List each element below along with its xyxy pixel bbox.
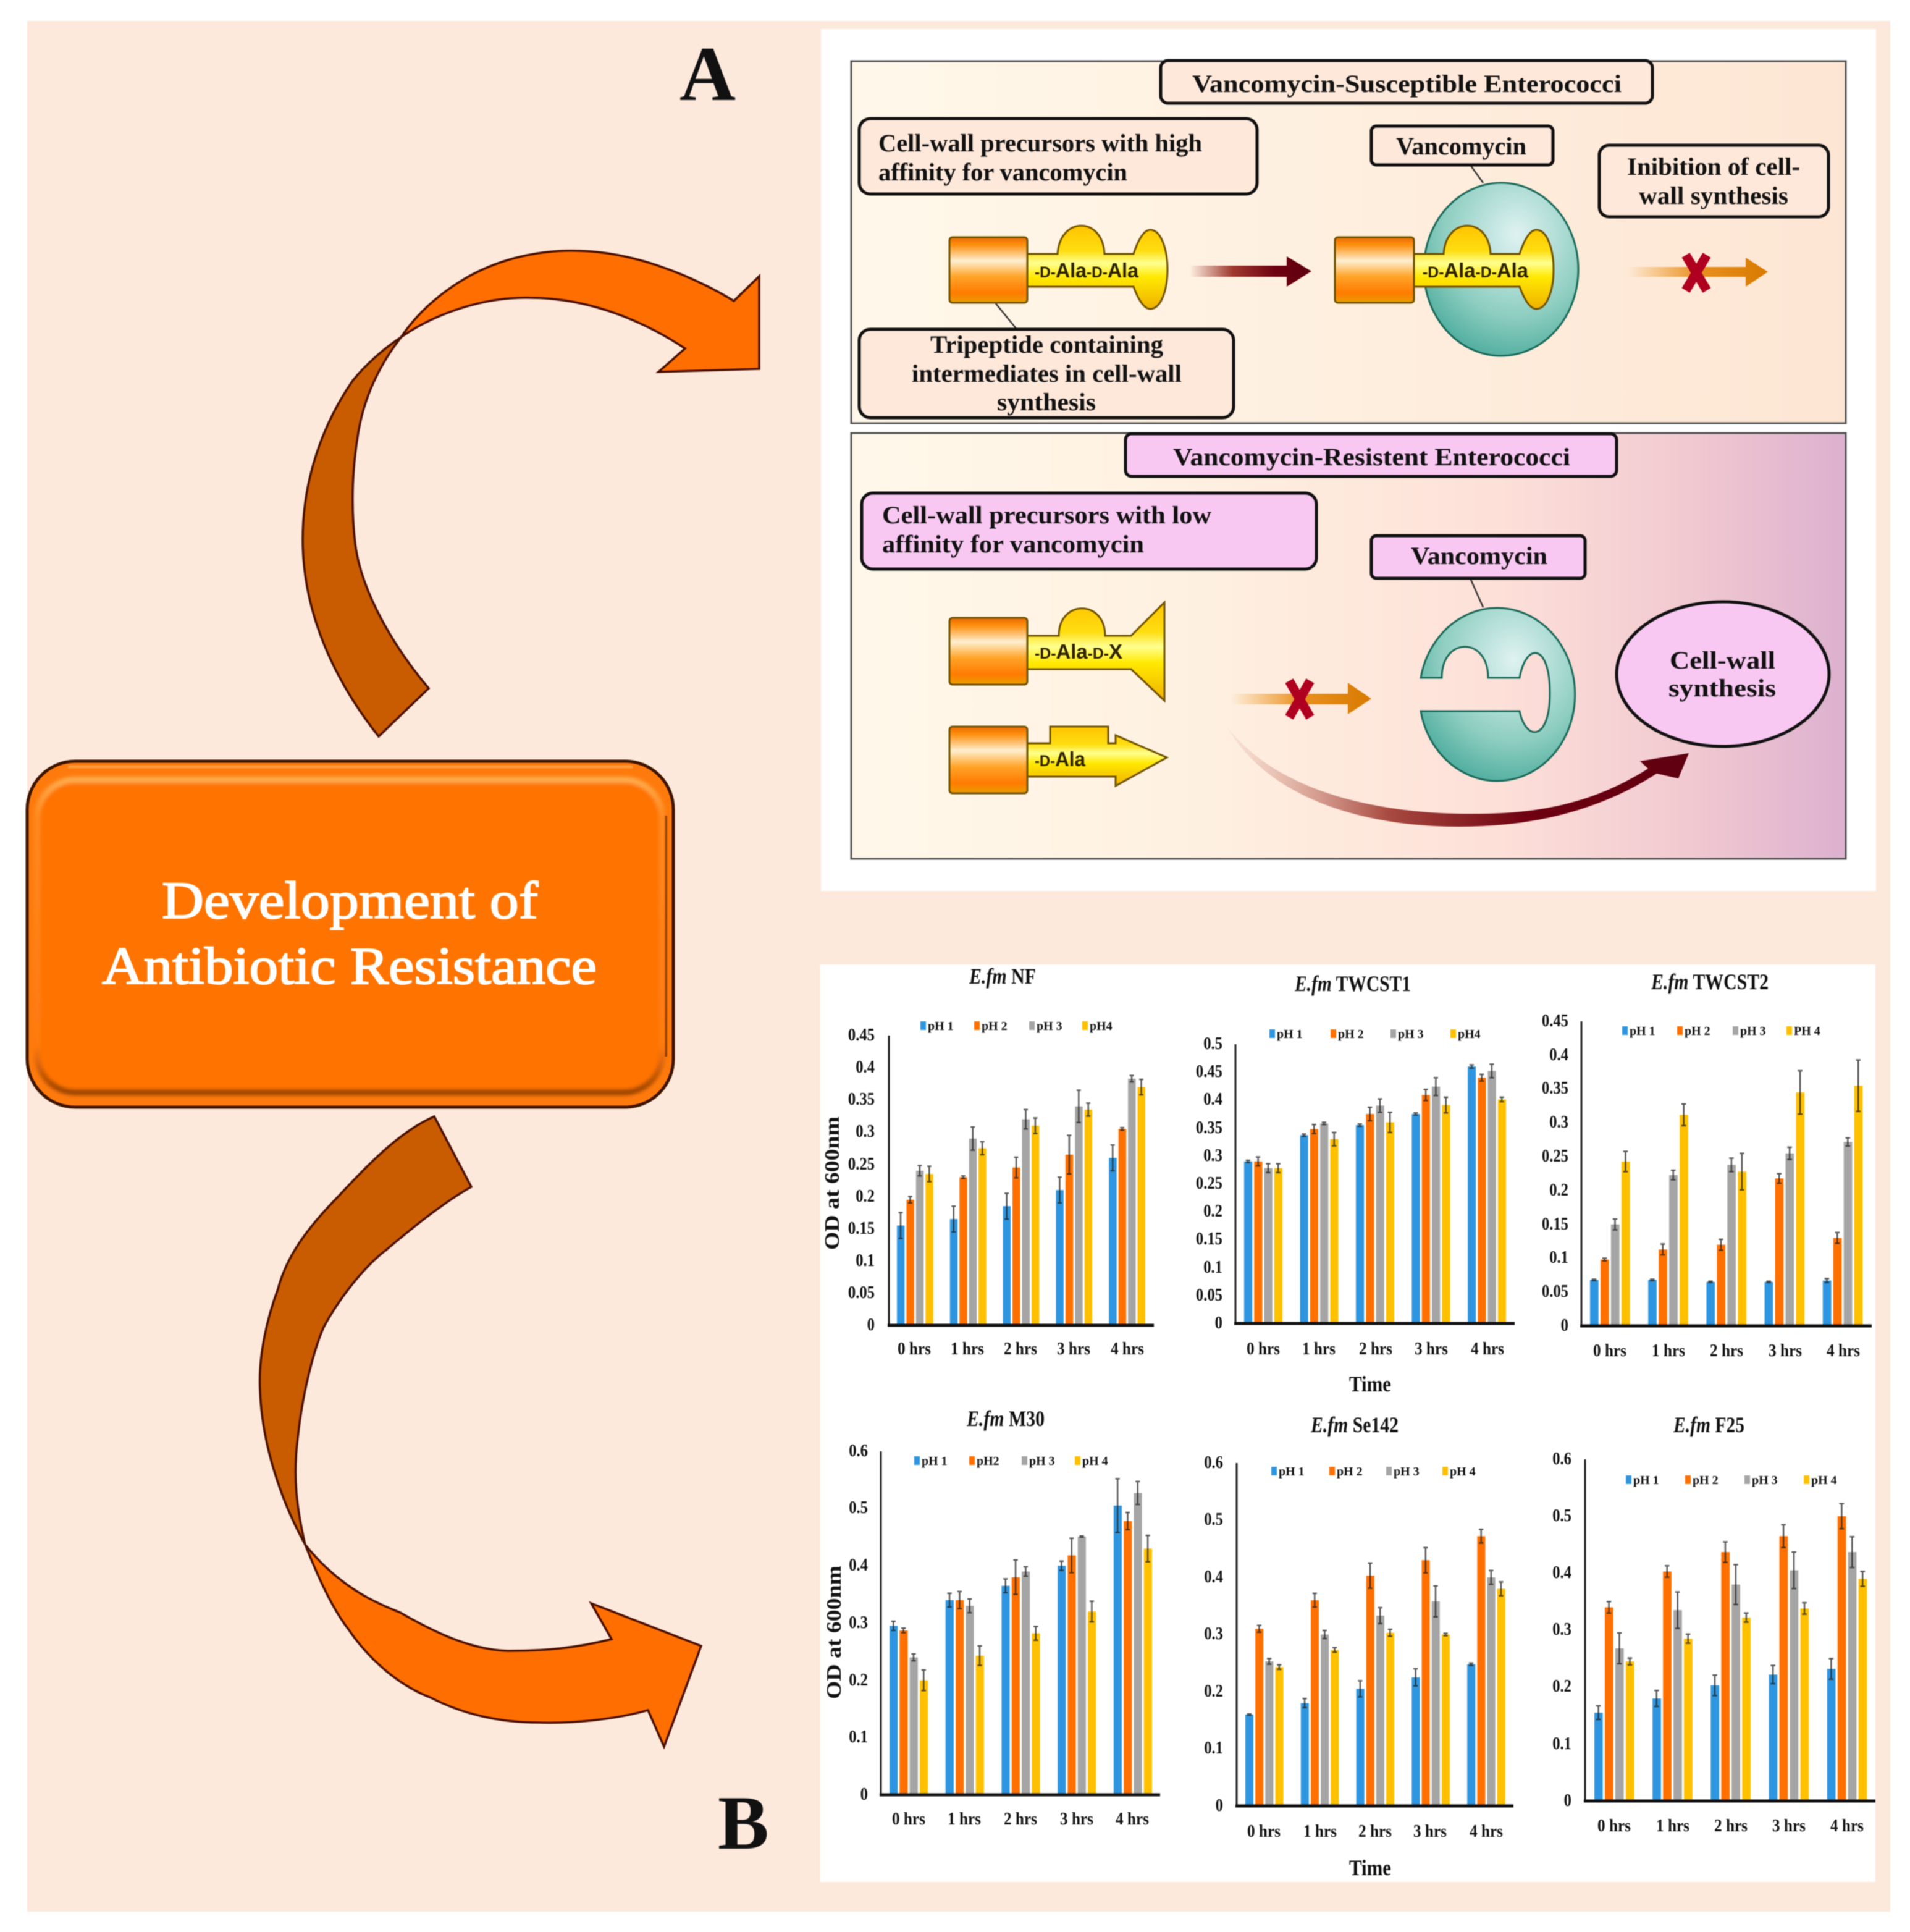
label: tripeptide intermediates: synthesis	[997, 388, 1096, 416]
y axis values	[1552, 1449, 1571, 1810]
y axis values: 0.3	[1552, 1620, 1571, 1639]
label: inhibition of cell-wall synthesis	[1599, 145, 1828, 217]
y axis values: 0.2	[1552, 1677, 1571, 1695]
x axis labels: 2 hrs	[1710, 1341, 1743, 1360]
y axis values: 0.1	[1204, 1739, 1223, 1757]
y axis values: 0	[867, 1315, 875, 1334]
axes	[888, 1036, 890, 1325]
chart: E.fm NF	[821, 964, 1154, 1358]
y axis values: 0.25	[1196, 1174, 1222, 1192]
y axis values: 0.1	[1552, 1734, 1571, 1753]
y axis values: 0.5	[849, 1498, 868, 1517]
y axis values: 0.45	[1196, 1062, 1222, 1081]
y axis values: 0.2	[1549, 1181, 1568, 1199]
legend: pH 1	[1633, 1474, 1659, 1487]
axes	[880, 1451, 882, 1795]
panel label A: A	[679, 32, 736, 117]
label: high affinity precursors: Cell-wall precursors with high	[878, 129, 1202, 157]
legend: pH 4	[1811, 1474, 1837, 1487]
x axis labels: 3 hrs	[1057, 1339, 1090, 1358]
legend	[914, 1454, 1108, 1468]
x axis labels: 1 hrs	[948, 1809, 981, 1828]
oval: Cell-wall synthesis	[1617, 602, 1829, 746]
y axis values: 0.05	[1196, 1286, 1222, 1304]
x axis labels: 1 hrs	[1302, 1339, 1336, 1358]
label: high affinity precursors: affinity for vancomycin	[878, 158, 1127, 186]
y axis values: 0.3	[856, 1122, 875, 1141]
label: Vancomycin (resistant)	[1371, 536, 1585, 578]
heading: Vancomycin-Resistent Enterococci: Vancomycin-Resistent Enterococci	[1173, 443, 1570, 471]
y axis values: 0.35	[1196, 1118, 1222, 1137]
label: Vancomycin (resistant): Vancomycin	[1411, 542, 1547, 570]
molecule: D-Ala precursor	[949, 727, 1167, 793]
legend	[1269, 1027, 1481, 1041]
x axis labels: 4 hrs	[1827, 1341, 1860, 1360]
y axis values	[848, 1026, 875, 1334]
axes	[1235, 1463, 1238, 1806]
y axis values: 0.35	[1542, 1079, 1568, 1097]
y axis values: 0.4	[849, 1556, 868, 1574]
legend	[920, 1019, 1113, 1033]
x axis labels: 4 hrs	[1471, 1339, 1504, 1358]
x axis labels: 1 hrs	[1652, 1341, 1685, 1360]
x axis labels: 4 hrs	[1111, 1339, 1144, 1358]
x axis labels: 4 hrs	[1830, 1816, 1864, 1835]
x axis labels	[892, 1809, 1149, 1828]
x axis labels: 1 hrs	[1303, 1821, 1337, 1841]
y axis values	[1204, 1453, 1223, 1815]
legend: pH 1	[1279, 1465, 1305, 1479]
axes	[1584, 1459, 1586, 1801]
x axis labels: 3 hrs	[1769, 1341, 1802, 1360]
oval: Cell-wall synthesis: Cell-wall	[1670, 646, 1775, 674]
arrow: curved down to panel B	[260, 1116, 701, 1747]
y axis values: 0.3	[1204, 1624, 1223, 1643]
y axis values	[849, 1441, 868, 1803]
x axis labels: 2 hrs	[1004, 1809, 1037, 1828]
legend: pH 1	[928, 1019, 954, 1033]
y axis values: 0.4	[1552, 1563, 1571, 1582]
x axis labels: 4 hrs	[1116, 1809, 1149, 1828]
chart: E.fm TWCST2	[1542, 969, 1872, 1360]
label: tripeptide intermediates	[859, 329, 1234, 418]
y axis values: 0.35	[848, 1090, 875, 1108]
legend: pH 3	[1398, 1027, 1424, 1041]
title: E.fm F25	[1673, 1412, 1744, 1437]
label: tripeptide intermediates: intermediates in cell-wall	[912, 360, 1182, 387]
y axis values: 0.1	[856, 1251, 875, 1270]
x axis labels: 0 hrs	[892, 1809, 925, 1828]
legend	[1271, 1465, 1476, 1479]
y axis values: 0.5	[1204, 1510, 1223, 1529]
x axis title: Time	[1349, 1855, 1391, 1880]
y axis title: OD at 600nm	[821, 1116, 844, 1250]
y axis values: 0.4	[1549, 1045, 1568, 1064]
x axis labels: 1 hrs	[951, 1339, 984, 1358]
panel B: growth charts	[820, 964, 1875, 1882]
x axis labels: 3 hrs	[1413, 1821, 1447, 1841]
y axis values: 0.2	[856, 1187, 875, 1205]
chart: E.fm TWCST1	[1196, 971, 1515, 1396]
x axis labels: 3 hrs	[1060, 1809, 1093, 1828]
chart: E.fm M30	[823, 1406, 1160, 1828]
panel: vancomycin-susceptible frame	[851, 61, 1846, 423]
x axis labels: 0 hrs	[1247, 1339, 1280, 1358]
molecule: D-Ala-D-X precursor	[949, 602, 1164, 701]
x axis labels: 2 hrs	[1004, 1339, 1037, 1358]
legend: pH 2	[1337, 1465, 1363, 1479]
legend: pH 4	[1450, 1465, 1476, 1479]
legend: pH 2	[1693, 1474, 1719, 1487]
y axis values: 0.15	[1196, 1230, 1222, 1248]
y axis values: 0.45	[848, 1026, 875, 1044]
label: Vancomycin	[1371, 126, 1553, 165]
y axis values: 0	[1215, 1314, 1222, 1332]
y axis values: 0.2	[1203, 1202, 1222, 1220]
vancomycin bound to precursor	[1335, 183, 1578, 356]
x axis labels: 0 hrs	[1593, 1341, 1626, 1360]
arrow: curved to cell-wall synthesis	[1227, 727, 1689, 827]
y axis values: 0	[1561, 1316, 1568, 1335]
legend: pH4	[1458, 1027, 1481, 1041]
y axis values: 0.25	[848, 1155, 875, 1173]
y axis values: 0.1	[1549, 1248, 1568, 1267]
legend: pH 1	[922, 1454, 948, 1468]
axes	[1580, 1021, 1583, 1326]
y axis values: 0.15	[1542, 1215, 1568, 1233]
x axis labels	[1247, 1339, 1504, 1358]
y axis values: 0.3	[849, 1613, 868, 1632]
arrow: dark red	[1190, 256, 1311, 287]
vancomycin with no binding	[1421, 608, 1575, 781]
x axis labels: 0 hrs	[1247, 1821, 1281, 1841]
x axis labels: 3 hrs	[1772, 1816, 1806, 1835]
legend: pH 1	[1277, 1027, 1303, 1041]
legend: pH 3	[1752, 1474, 1778, 1487]
y axis values	[1542, 1011, 1568, 1335]
legend: pH2	[977, 1454, 999, 1468]
bars	[1245, 1529, 1505, 1806]
heading: Vancomycin-Susceptible Enterococci: Vancomycin-Susceptible Enterococci	[1192, 70, 1622, 98]
molecule: D-Ala precursor: -D-Ala	[1035, 748, 1086, 770]
heading: Vancomycin-Resistent Enterococci	[1125, 434, 1617, 476]
label: inhibition of cell-wall synthesis: Inibition of cell-	[1627, 153, 1800, 180]
legend: pH 3	[1740, 1024, 1766, 1038]
x axis labels: 2 hrs	[1358, 1821, 1392, 1841]
y axis values: 0	[1564, 1791, 1571, 1810]
label: low affinity precursors	[862, 493, 1316, 569]
legend: pH 2	[1338, 1027, 1364, 1041]
oval: Cell-wall synthesis: synthesis	[1668, 674, 1776, 702]
y axis values: 0.25	[1542, 1147, 1568, 1165]
vancomycin bound to precursor: -D-Ala-D-Ala	[1423, 259, 1529, 282]
arrow: curved up to panel A	[303, 251, 759, 736]
legend: pH 4	[1082, 1454, 1108, 1468]
legend: pH 3	[1037, 1019, 1062, 1033]
panel A: vancomycin mechanism	[821, 29, 1876, 891]
x axis labels	[1597, 1816, 1864, 1835]
x axis labels: 4 hrs	[1470, 1821, 1503, 1841]
legend: PH 4	[1794, 1024, 1820, 1038]
central box: Development of Antibiotic Resistance: Antibiotic Resistance	[102, 936, 597, 995]
bars	[1244, 1065, 1506, 1323]
y axis values: 0.6	[1204, 1453, 1223, 1472]
chart: E.fm Se142	[1204, 1412, 1513, 1880]
y axis values: 0.3	[1549, 1113, 1568, 1131]
legend: pH 1	[1630, 1024, 1655, 1038]
legend: pH 2	[1685, 1024, 1710, 1038]
arrow: blocked binding	[1231, 681, 1371, 717]
x axis labels	[898, 1339, 1144, 1358]
y axis values: 0.5	[1203, 1034, 1222, 1053]
y axis values	[1196, 1034, 1222, 1332]
label: tripeptide intermediates: Tripeptide containing	[930, 331, 1163, 358]
title: E.fm Se142	[1310, 1412, 1399, 1437]
title: E.fm TWCST1	[1294, 971, 1411, 996]
y axis values: 0.6	[849, 1441, 868, 1460]
label: Vancomycin: Vancomycin	[1396, 132, 1526, 160]
title: E.fm NF	[969, 964, 1036, 989]
y axis values: 0.4	[1204, 1567, 1223, 1586]
molecule: D-Ala-D-X precursor: -D-Ala-D-X	[1035, 640, 1122, 663]
y axis values: 0.2	[1204, 1682, 1223, 1700]
molecule: D-Ala-D-Ala precursor	[949, 226, 1167, 309]
x axis title: Time	[1349, 1372, 1391, 1396]
bars	[890, 1479, 1152, 1795]
label: low affinity precursors: Cell-wall precursors with low	[882, 501, 1211, 529]
legend	[1626, 1474, 1837, 1487]
central box: Development of Antibiotic Resistance: Development of	[162, 871, 538, 930]
panel: vancomycin-resistant frame	[851, 433, 1846, 859]
y axis values: 0.45	[1542, 1011, 1568, 1030]
molecule: D-Ala-D-Ala precursor: -D-Ala-D-Ala	[1035, 259, 1139, 282]
chart: E.fm F25	[1552, 1412, 1875, 1835]
label: high affinity precursors	[859, 119, 1257, 194]
y axis values: 0	[1216, 1796, 1223, 1815]
y axis values: 0.3	[1203, 1146, 1222, 1165]
y axis values: 0.15	[848, 1219, 875, 1238]
y axis values: 0.05	[1542, 1282, 1568, 1301]
y axis values: 0.4	[856, 1058, 875, 1076]
bars	[1590, 1060, 1862, 1326]
x axis labels: 2 hrs	[1359, 1339, 1392, 1358]
heading: Vancomycin-Susceptible Enterococci	[1161, 61, 1652, 103]
x axis labels: 2 hrs	[1714, 1816, 1748, 1835]
connector lines	[995, 165, 1483, 607]
x axis labels	[1593, 1341, 1860, 1360]
title: E.fm M30	[966, 1406, 1045, 1431]
axes	[1234, 1044, 1237, 1323]
y axis values: 0	[860, 1785, 868, 1803]
panel label B: B	[718, 1781, 769, 1865]
label: inhibition of cell-wall synthesis: wall synthesis	[1639, 182, 1788, 209]
x axis labels: 1 hrs	[1656, 1816, 1689, 1835]
y axis title: OD at 600nm	[823, 1566, 846, 1699]
y axis values: 0.5	[1552, 1506, 1571, 1525]
legend	[1622, 1024, 1820, 1038]
y axis values: 0.4	[1203, 1090, 1222, 1108]
x axis labels: 0 hrs	[1597, 1816, 1631, 1835]
x axis labels: 0 hrs	[898, 1339, 931, 1358]
legend: pH 3	[1394, 1465, 1420, 1479]
legend: pH 3	[1029, 1454, 1055, 1468]
arrow: blocked, inhibition	[1628, 255, 1768, 290]
legend: pH4	[1090, 1019, 1113, 1033]
title: E.fm TWCST2	[1651, 969, 1769, 994]
legend: pH 2	[982, 1019, 1008, 1033]
bars	[897, 1076, 1145, 1325]
y axis values: 0.05	[848, 1283, 875, 1302]
x axis labels: 3 hrs	[1415, 1339, 1448, 1358]
y axis values: 0.6	[1552, 1449, 1571, 1468]
y axis values: 0.1	[849, 1727, 868, 1746]
x axis labels	[1247, 1821, 1503, 1841]
y axis values: 0.1	[1203, 1258, 1222, 1276]
y axis values: 0.2	[849, 1671, 868, 1689]
label: low affinity precursors: affinity for vancomycin	[882, 530, 1144, 558]
bars	[1594, 1504, 1867, 1801]
central box: Development of Antibiotic Resistance	[27, 761, 673, 1107]
